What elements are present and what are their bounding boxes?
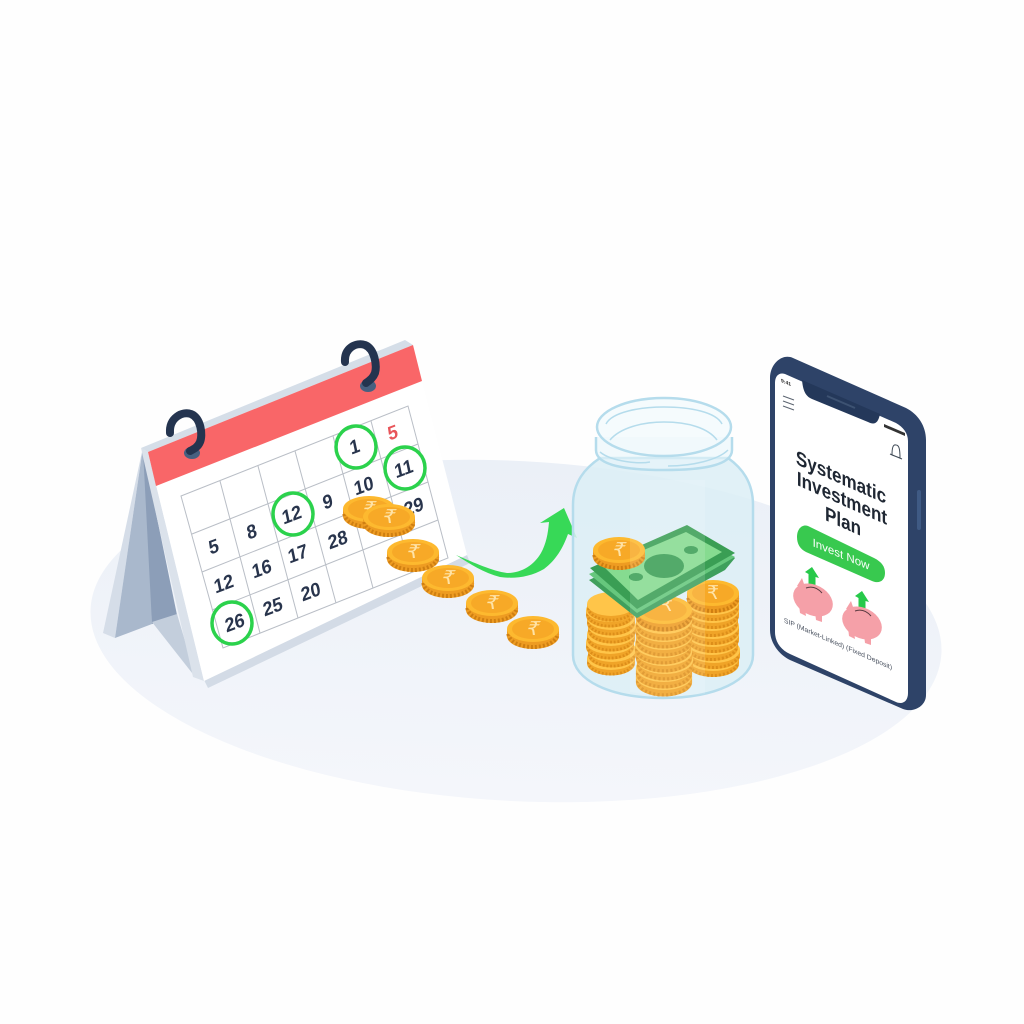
calendar numbers (207, 420, 425, 637)
coin 3: ₹ (403, 541, 423, 563)
left coin stack (586, 592, 636, 675)
right piggy bank (836, 591, 888, 646)
calendar numbers: 11 (392, 455, 415, 482)
coin 5: ₹ (482, 592, 502, 614)
jar glass highlight (630, 480, 705, 697)
coin 6: ₹ (523, 618, 543, 640)
calendar numbers: 25 (261, 592, 284, 621)
coin 1 (343, 496, 395, 529)
stack of green cash (589, 525, 735, 618)
coin 2: ₹ (379, 506, 399, 528)
green date circles (212, 426, 425, 644)
bell icon (890, 445, 902, 459)
jar neck and rim (596, 398, 732, 470)
title: Systematic (796, 446, 886, 509)
coin resting on cash (593, 537, 645, 570)
title: Plan (825, 502, 861, 541)
calendar numbers: 26 (223, 608, 246, 637)
coin 1: ₹ (359, 498, 379, 520)
coin 4 (422, 565, 474, 598)
calendar numbers: 10 (352, 471, 375, 500)
phone screen (775, 373, 908, 703)
calendar numbers: 16 (250, 554, 273, 583)
calendar side edge (141, 448, 204, 681)
right coin stack (686, 580, 740, 677)
background floor ellipse (82, 439, 950, 823)
calendar grid (181, 406, 448, 648)
left piggy bank (787, 567, 839, 623)
title (796, 446, 888, 541)
calendar numbers: 20 (299, 577, 322, 606)
invest now button (797, 526, 885, 582)
middle coin stack (635, 594, 693, 697)
calendar back stand (103, 447, 196, 678)
calendar numbers: 12 (280, 500, 303, 529)
calendar numbers: 8 (245, 519, 259, 544)
coin 5 (466, 590, 518, 623)
calendar numbers: 17 (286, 539, 309, 568)
speaker (827, 396, 855, 408)
coin 4: ₹ (438, 567, 458, 589)
right coin stack: ₹ (707, 582, 719, 604)
green growth arrow (456, 508, 577, 578)
red header band (148, 345, 422, 486)
left binder ring (170, 413, 201, 459)
phone body (770, 357, 926, 710)
invest now button: Invest Now (813, 536, 870, 573)
phone notch (802, 380, 880, 423)
hamburger menu icon (783, 396, 794, 410)
calendar top edge (141, 340, 413, 452)
smartphone (770, 357, 926, 710)
phone side button (917, 490, 921, 530)
coin resting on cash: ₹ (609, 539, 629, 561)
calendar numbers: 12 (212, 569, 235, 598)
right binder ring (345, 344, 376, 392)
middle coin stack: ₹ (661, 594, 673, 616)
calendar numbers: 1 (348, 434, 362, 459)
calendar numbers: 28 (326, 525, 349, 554)
calendar numbers: 5 (386, 420, 400, 445)
coin 2 (363, 504, 415, 537)
glass jar (573, 398, 753, 698)
status time: 9:41 (781, 378, 791, 388)
calendar (103, 340, 470, 688)
investment caption: SIP (Market-Linked) (Fixed Deposit) (784, 616, 892, 672)
calendar numbers: 9 (321, 489, 335, 514)
calendar shadow edge (204, 555, 470, 688)
status icons (884, 424, 905, 436)
jar body (573, 458, 753, 698)
coin 6 (507, 616, 559, 649)
coin trail (343, 496, 559, 649)
calendar numbers: 5 (207, 534, 221, 559)
title: Investment (797, 467, 888, 530)
coin 3 (387, 539, 439, 572)
calendar page (148, 345, 467, 681)
calendar numbers: 29 (402, 492, 425, 521)
